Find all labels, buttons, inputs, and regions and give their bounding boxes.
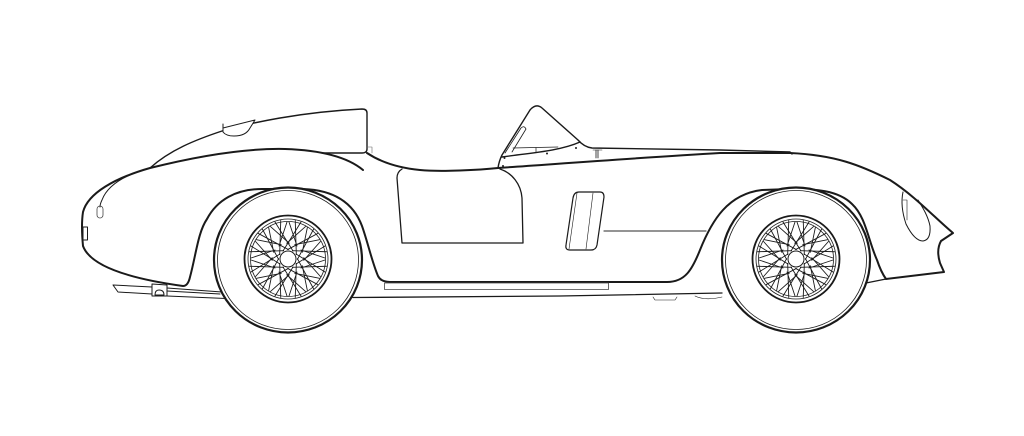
wheel: front [722, 188, 870, 332]
rear deck and fin [100, 109, 372, 207]
exhaust and underside [113, 284, 722, 300]
tail badge [83, 227, 88, 240]
headlight [902, 192, 930, 241]
side trim line [604, 230, 706, 232]
windscreen [498, 106, 792, 168]
side vent [566, 192, 604, 250]
rear lamp [97, 206, 103, 218]
fuel filler cap [223, 120, 255, 136]
door [397, 169, 523, 243]
wheel: rear [214, 188, 362, 332]
main body outline [82, 149, 953, 286]
sill panel [384, 283, 608, 290]
